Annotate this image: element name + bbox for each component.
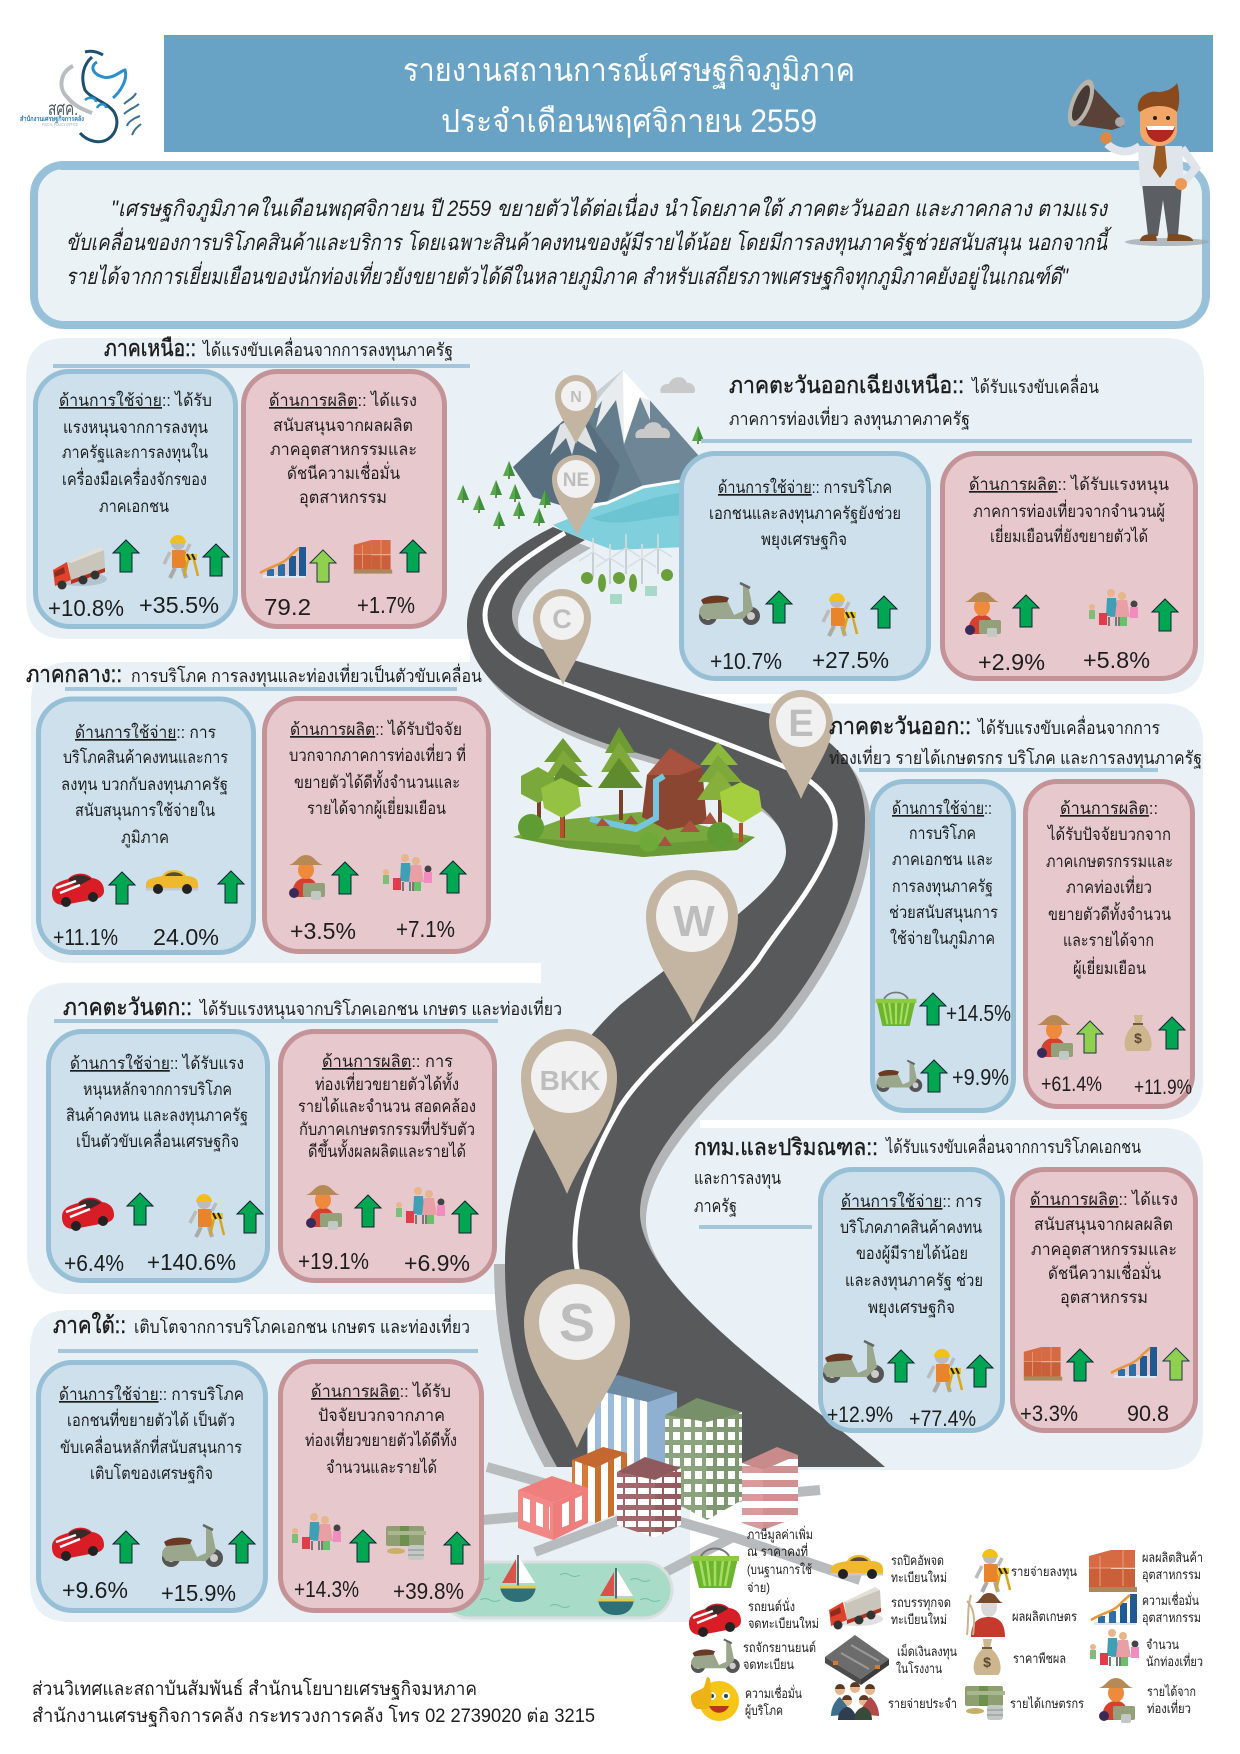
pine: centre xyxy=(598,727,643,788)
card: east production: และรายได้จาก xyxy=(1063,930,1154,950)
card: north spending: แรงหนุนจากการลงทุน xyxy=(63,418,208,438)
summary quote box xyxy=(34,161,1206,325)
icon: basket xyxy=(691,1548,739,1588)
icon: clouds xyxy=(635,377,695,438)
round tree: right xyxy=(720,782,762,823)
legend text: tourists: นักท่องเที่ยว xyxy=(1146,1653,1203,1669)
legend text: motorcycle: รถจักรยานยนต์ xyxy=(743,1640,816,1655)
building: green tower xyxy=(665,1398,742,1520)
legend text: farm output: ผลผลิตเกษตร xyxy=(1012,1609,1077,1624)
card: south production: จำนวนและรายได้ xyxy=(326,1457,437,1477)
icon: car xyxy=(689,1604,741,1637)
card: east spending xyxy=(872,782,1014,1110)
card: northeast spending: ด้านการใช้จ่าย:: การบริโภค xyxy=(718,477,892,497)
card: west spending: +140.6% xyxy=(147,1249,236,1275)
card: south spending: +15.9% xyxy=(161,1580,236,1606)
card: east production: ภาคเกษตรกรรมและ xyxy=(1046,852,1173,871)
header banner xyxy=(164,35,1213,152)
heading: northeast: ภาคการท่องเที่ยว ลงทุนภาคภาครัฐ xyxy=(729,406,970,430)
legend text: pickup: ทะเบียนใหม่ xyxy=(891,1570,947,1585)
card: northeast spending: พยุงเศรษฐกิจ xyxy=(761,530,847,550)
heading: east: ภาคตะวันออก:: xyxy=(829,713,971,739)
card: bangkok production: 90.8 xyxy=(1127,1401,1169,1426)
card: west spending: สินค้าคงทน และลงทุนภาครัฐ xyxy=(66,1106,248,1126)
heading: northeast xyxy=(701,372,1192,443)
card: central production: บวกจากภาคการท่องเที่ยว ที่ xyxy=(289,743,466,765)
card: northeast production: ภาคการท่องเที่ยวจากจำนวนผู้ xyxy=(973,499,1165,522)
card: northeast production xyxy=(942,454,1196,678)
card: bangkok spending: +12.9% xyxy=(827,1402,893,1427)
card: west production: ด้านการผลิต:: การ xyxy=(322,1052,453,1071)
legend text: current expenditure: รายจ่ายประจำ xyxy=(888,1696,957,1711)
card: east production: ผู้เยี่ยมเยือน xyxy=(1073,956,1146,979)
legend text: pickup xyxy=(891,1553,947,1585)
logo: สศค. xyxy=(48,99,78,120)
card: central production xyxy=(264,698,488,952)
card: south spending: ขับเคลื่อนหลักที่สนับสนุนการ xyxy=(60,1435,242,1458)
card: bangkok spending: ของผู้มีรายได้น้อย xyxy=(856,1243,968,1264)
legend text: vat: ภาษีมูลค่าเพิ่ม xyxy=(747,1526,813,1543)
card: central spending: สนับสนุนการใช้จ่ายใน xyxy=(75,800,215,821)
legend text: passenger car xyxy=(748,1598,819,1631)
card: west spending: เป็นตัวขับเคลื่อนเศรษฐกิจ xyxy=(76,1129,239,1152)
icon: people xyxy=(831,1682,879,1720)
card: south production: ด้านการผลิต:: ได้รับ xyxy=(311,1381,451,1401)
icon: chart xyxy=(1091,1594,1137,1625)
card: west spending xyxy=(48,1032,268,1280)
card: west production: รายได้และจำนวน สอดคล้อง xyxy=(298,1096,476,1116)
footer credits: ส่วนวิเทศและสถาบันสัมพันธ์ สำนักนโยบายเศรษฐกิจมหภาค xyxy=(32,1677,477,1700)
legend text: industrial output xyxy=(1142,1550,1203,1583)
card: south spending: เติบโตของเศรษฐกิจ xyxy=(90,1463,213,1484)
card: north spending: ด้านการใช้จ่าย:: ได้รับ xyxy=(59,390,212,410)
card: south spending: ด้านการใช้จ่าย:: การบริโภค xyxy=(59,1384,244,1404)
card: east production: ด้านการผลิต:: xyxy=(1060,799,1158,818)
pine: left xyxy=(544,738,593,787)
card: east spending: ใช้จ่ายในภูมิภาค xyxy=(890,928,995,949)
panel: north xyxy=(36,335,470,626)
heading: central: ภาคกลาง:: xyxy=(26,661,122,687)
card: central spending: 24.0% xyxy=(153,924,219,950)
card: east production: ได้รับปัจจัยบวกจาก xyxy=(1046,824,1171,844)
icon: factory xyxy=(825,1635,889,1685)
icon: boxes xyxy=(1089,1550,1137,1592)
heading: east xyxy=(829,713,1202,772)
pine: right xyxy=(697,742,743,800)
legend text: industrial confidence xyxy=(1142,1592,1201,1626)
heading: bangkok: ได้รับแรงขับเคลื่อนจากการบริโภคเอกชน xyxy=(884,1134,1141,1157)
card: north production: ดัชนีความเชื่อมั่น xyxy=(287,461,400,483)
legend text: farm income: รายได้เกษตรกร xyxy=(1010,1696,1084,1711)
card: central spending: ลงทุน บวกกับลงทุนภาครัฐ xyxy=(61,775,228,795)
legend text: passenger car: จดทะเบียนใหม่ xyxy=(748,1616,819,1631)
legend xyxy=(689,1526,1203,1723)
legend text: tourists: จำนวน xyxy=(1146,1637,1179,1652)
city buildings xyxy=(483,1375,860,1580)
panel: south xyxy=(38,1312,482,1610)
building: orange block xyxy=(572,1447,627,1523)
card: north production xyxy=(244,372,444,626)
round tree: left back xyxy=(521,767,556,803)
card: bangkok spending xyxy=(820,1170,1002,1431)
legend text: motorcycle xyxy=(743,1640,816,1672)
summary text xyxy=(66,193,1112,290)
card: northeast production: เยี่ยมเยือนที่ยังขยายตัวได้ xyxy=(990,524,1148,546)
card: central spending: +11.1% xyxy=(53,924,118,950)
legend text: tourism income: ท่องเที่ยว xyxy=(1147,1700,1191,1716)
pin N: N xyxy=(570,389,582,406)
icon: pickup xyxy=(831,1555,883,1579)
card: central production: รายได้จากผู้เยี่ยมเยือน xyxy=(307,796,446,819)
building: blue tower xyxy=(587,1375,677,1480)
heading: bangkok xyxy=(694,1134,1141,1229)
heading: west: ภาคตะวันตก:: xyxy=(63,994,192,1020)
pin BKK xyxy=(521,1029,617,1194)
card: west spending: หนุนหลักจากการบริโภค xyxy=(83,1079,232,1100)
card: northeast production: ด้านการผลิต:: ได้รับแรงหนุน xyxy=(969,474,1169,495)
mascot with megaphone xyxy=(1062,76,1209,246)
legend text: crop price: ราคาพืชผล xyxy=(1013,1651,1066,1666)
card: central production: ขยายตัวได้ดีทั้งจำนวนและ xyxy=(294,770,460,792)
card: south production: +14.3% xyxy=(294,1576,359,1602)
map pins xyxy=(521,375,833,1448)
card: east spending: +14.5% xyxy=(946,1000,1011,1026)
card: west spending: ด้านการใช้จ่าย:: ได้รับแรง xyxy=(70,1053,244,1073)
legend text: industrial confidence: อุตสาหกรรม xyxy=(1142,1610,1201,1626)
heading: south: เติบโตจากการบริโภคเอกชน เกษตร และท่องเที่ยว xyxy=(134,1314,470,1337)
heading: south: ภาคใต้:: xyxy=(53,1312,126,1338)
heading: northeast: ได้รับแรงขับเคลื่อน xyxy=(970,374,1099,397)
legend text: vat: (บนฐานการใช้ xyxy=(747,1562,812,1578)
legend text: factory investment: ในโรงงาน xyxy=(896,1661,942,1676)
card: central spending: ด้านการใช้จ่าย:: การ xyxy=(75,722,216,742)
panel: northeast xyxy=(682,372,1196,678)
water with boats xyxy=(441,1555,672,1618)
pin S xyxy=(524,1269,630,1448)
card: bangkok spending: +77.4% xyxy=(909,1406,976,1431)
card: northeast production: +5.8% xyxy=(1083,647,1150,673)
card: north spending: +35.5% xyxy=(139,592,219,618)
panel: bangkok and vicinity xyxy=(694,1134,1196,1431)
pine trees xyxy=(457,426,704,529)
card: northeast spending: +10.7% xyxy=(710,648,782,674)
card: bangkok production xyxy=(1012,1170,1196,1430)
card: central production: +3.5% xyxy=(290,918,356,944)
card: bangkok production: ด้านการผลิต:: ได้แรง xyxy=(1030,1189,1178,1209)
heading: bangkok: กทม.และปริมณฑล:: xyxy=(694,1134,878,1160)
heading: bangkok: ภาครัฐ xyxy=(694,1196,737,1217)
card: west production: +6.9% xyxy=(404,1250,470,1276)
card: west production: ดีขึ้นทั้งผลผลิตและรายได้ xyxy=(308,1139,466,1161)
icon: farmer xyxy=(967,1593,1005,1637)
round tree: left front xyxy=(541,778,581,818)
pin C: C xyxy=(552,604,572,634)
icon: money bag xyxy=(974,1639,1001,1675)
legend text: motorcycle: จดทะเบียน xyxy=(743,1657,794,1672)
heading: northeast: ภาคตะวันออกเฉียงเหนือ:: xyxy=(729,372,964,398)
card: east production: ภาคท่องเที่ยว xyxy=(1066,875,1152,897)
panel: central xyxy=(26,661,488,952)
logo xyxy=(20,51,141,142)
card: north spending: +10.8% xyxy=(48,595,124,621)
heading: central: การบริโภค การลงทุนและท่องเที่ยวเป็นตัวขับเคลื่อน xyxy=(131,663,482,687)
logo: FISCAL POLICY OFFICE xyxy=(42,122,78,127)
legend text: tourism income xyxy=(1147,1684,1196,1716)
icon: truck xyxy=(829,1587,883,1630)
icon: worker xyxy=(976,1549,1010,1592)
logo: สำนักงานเศรษฐกิจการคลัง xyxy=(20,115,84,124)
card: south spending: +9.6% xyxy=(62,1577,128,1603)
card: east spending: การลงทุนภาครัฐ xyxy=(892,877,993,897)
card: central production: ด้านการผลิต:: ได้รับปัจจัย xyxy=(290,719,462,739)
card: north spending: ภาคเอกชน xyxy=(99,497,169,516)
card: bangkok spending: พยุงเศรษฐกิจ xyxy=(868,1298,955,1318)
pin BKK: BKK xyxy=(540,1065,600,1096)
legend text: industrial confidence: ความเชื่อมั่น xyxy=(1142,1592,1199,1608)
card: north production: +1.7% xyxy=(357,592,415,618)
card: bangkok spending: และลงทุนภาครัฐ ช่วย xyxy=(845,1271,983,1291)
card: bangkok spending: บริโภคภาคสินค้าคงทน xyxy=(840,1217,982,1237)
pin NE: NE xyxy=(563,470,589,491)
legend text: pickup: รถปิคอัพจด xyxy=(891,1553,944,1568)
card: northeast spending: เอกชนและลงทุนภาครัฐยังช่วย xyxy=(709,504,901,524)
card: bangkok spending: ด้านการใช้จ่าย:: การ xyxy=(841,1191,982,1211)
icon: boat xyxy=(500,1555,536,1602)
card: north production: ด้านการผลิต:: ได้แรง xyxy=(269,390,417,410)
summary text: รายได้จากการเยี่ยมเยือนของนักท่องเที่ยวยังขยายตัวได้ดีในหลายภูมิภาค สำหรับเสถียรภาพเศรษฐกิจทุกภูมิภาคยังอยู่ในเกณฑ์ดี" xyxy=(66,261,1069,290)
card: west production: +19.1% xyxy=(298,1248,369,1274)
pin W: W xyxy=(673,897,715,946)
heading: north xyxy=(53,335,470,368)
building: brick block xyxy=(617,1457,681,1538)
icon: scooter xyxy=(691,1639,740,1673)
card: bangkok production: ดัชนีความเชื่อมั่น xyxy=(1048,1261,1161,1283)
card: north production: ภาคอุตสาหกรรมและ xyxy=(270,440,417,460)
legend text: industrial output: ผลผลิตสินค้า xyxy=(1142,1550,1203,1565)
card: north production: สนับสนุนจากผลผลิต xyxy=(273,416,413,436)
card: central production: +7.1% xyxy=(396,916,455,942)
card: north spending: เครื่องมือเครื่องจักรของ xyxy=(62,467,207,489)
card: north spending xyxy=(36,372,236,626)
heading: bangkok: และการลงทุน xyxy=(694,1168,781,1189)
forest island xyxy=(513,727,762,857)
legend text: industrial output: อุตสาหกรรม xyxy=(1142,1567,1201,1583)
card: northeast spending xyxy=(682,454,928,678)
legend text: truck: ทะเบียนใหม่ xyxy=(891,1612,947,1627)
legend text: tourism income: รายได้จาก xyxy=(1147,1684,1196,1699)
card: east spending: ช่วยสนับสนุนการ xyxy=(889,903,998,923)
building: coral block xyxy=(518,1476,588,1540)
mountain xyxy=(513,370,698,550)
card: west production: ท่องเที่ยวขยายตัวได้ทั้ง xyxy=(315,1072,459,1094)
card: bangkok production: อุตสาหกรรม xyxy=(1060,1288,1148,1308)
card: south spending xyxy=(38,1362,266,1610)
wind farm xyxy=(579,534,673,604)
card: east production: +11.9% xyxy=(1134,1076,1192,1099)
legend text: truck: รถบรรทุกจด xyxy=(891,1595,951,1611)
footer credits: สำนักงานเศรษฐกิจการคลัง กระทรวงการคลัง โทร 02 2739020 ต่อ 3215 xyxy=(32,1704,595,1727)
card: east spending: ภาคเอกชน และ xyxy=(892,850,993,869)
card: south production: ท่องเที่ยวขยายตัวได้ดีทั้ง xyxy=(305,1428,457,1450)
heading: north: ได้แรงขับเคลื่อนจากการลงทุนภาครัฐ xyxy=(201,337,453,361)
legend text: consumer confidence: ความเชื่อมั่น xyxy=(745,1685,802,1701)
title xyxy=(403,52,855,139)
legend text: investment expenditure: รายจ่ายลงทุน xyxy=(1011,1564,1077,1580)
legend text: consumer confidence xyxy=(745,1685,802,1719)
legend text: passenger car: รถยนต์นั่ง xyxy=(748,1598,795,1614)
pin N xyxy=(555,375,597,444)
building: pink block xyxy=(742,1447,798,1530)
card: west spending: +6.4% xyxy=(64,1250,124,1276)
heading: west: ได้รับแรงหนุนจากบริโภคเอกชน เกษตร และท่องเที่ยว xyxy=(198,996,562,1020)
icon: family xyxy=(1090,1629,1139,1666)
icon: cash xyxy=(965,1686,1005,1720)
title: ประจำเดือนพฤศจิกายน 2559 xyxy=(441,103,817,139)
heading: east: ได้รับแรงขับเคลื่อนจากการ xyxy=(976,715,1160,738)
panel: west xyxy=(48,994,562,1280)
panel: east xyxy=(829,713,1202,1110)
legend text: consumer confidence: ผู้บริโภค xyxy=(745,1703,783,1719)
icon: tourist income xyxy=(1099,1678,1135,1723)
heading: south xyxy=(53,1312,478,1353)
card: south production: ปัจจัยบวกจากภาค xyxy=(318,1406,445,1425)
legend text: tourists xyxy=(1146,1637,1203,1669)
card: north production: 79.2 xyxy=(264,594,311,620)
legend text: truck xyxy=(891,1595,951,1627)
card: south production xyxy=(280,1362,482,1610)
legend text: factory investment xyxy=(896,1642,957,1676)
background panels xyxy=(0,338,1204,1622)
pin S: S xyxy=(559,1293,595,1353)
card: east spending: การบริโภค xyxy=(909,823,976,843)
card: east spending: +9.9% xyxy=(952,1064,1009,1090)
footer credits xyxy=(32,1677,595,1727)
legend text: factory investment: เม็ดเงินลงทุน xyxy=(897,1642,957,1660)
heading: north: ภาคเหนือ:: xyxy=(104,335,196,361)
card: east spending: ด้านการใช้จ่าย:: xyxy=(892,798,992,818)
card: central spending: บริโภคสินค้าคงทนและการ xyxy=(63,747,228,767)
card: northeast spending: +27.5% xyxy=(812,647,889,673)
card: central spending: ภูมิภาค xyxy=(121,828,169,848)
winding road xyxy=(467,527,891,1475)
legend text: vat: ณ ราคาคงที่ xyxy=(747,1543,808,1559)
heading: west xyxy=(54,994,562,1023)
icon: smiley xyxy=(691,1677,739,1721)
legend text: vat: จ่าย) xyxy=(747,1580,770,1595)
summary text: "เศรษฐกิจภูมิภาคในเดือนพฤศจิกายน ปี 2559 ขยายตัวได้ต่อเนื่อง นำโดยภาคใต้ ภาคตะวันออก และภาคกลาง ตามแรง xyxy=(111,193,1109,222)
card: east production: +61.4% xyxy=(1041,1073,1102,1096)
card: west production xyxy=(280,1032,494,1280)
pin E xyxy=(769,690,833,799)
card: bangkok production: +3.3% xyxy=(1020,1401,1078,1426)
icon: second boat xyxy=(598,1568,634,1615)
title: รายงานสถานการณ์เศรษฐกิจภูมิภาค xyxy=(403,52,855,90)
pin C xyxy=(533,589,591,685)
heading: east: ท่องเที่ยว รายได้เกษตรกร บริโภค และการลงทุนภาครัฐ xyxy=(829,745,1202,769)
pin NE xyxy=(552,455,600,535)
card: west production: กับภาคเกษตรกรรมที่ปรับตัว xyxy=(299,1117,475,1139)
legend text: vat xyxy=(747,1526,813,1595)
card: north production: อุตสาหกรรม xyxy=(299,488,387,508)
card: south spending: เอกชนที่ขยายตัวได้ เป็นตัว xyxy=(67,1408,235,1430)
pin E: E xyxy=(788,703,814,745)
card: south production: +39.8% xyxy=(393,1578,464,1604)
card: east production: ขยายตัวดีทั้งจำนวน xyxy=(1048,902,1171,924)
pin W xyxy=(646,870,738,1023)
card: east production xyxy=(1026,782,1192,1106)
card: central spending xyxy=(38,699,254,952)
card: bangkok production: สนับสนุนจากผลผลิต xyxy=(1034,1215,1173,1235)
card: north spending: ภาครัฐและการลงทุนใน xyxy=(62,442,208,463)
card: northeast production: +2.9% xyxy=(978,649,1045,675)
card: bangkok production: ภาคอุตสาหกรรมและ xyxy=(1031,1240,1177,1260)
heading: central xyxy=(26,661,482,691)
